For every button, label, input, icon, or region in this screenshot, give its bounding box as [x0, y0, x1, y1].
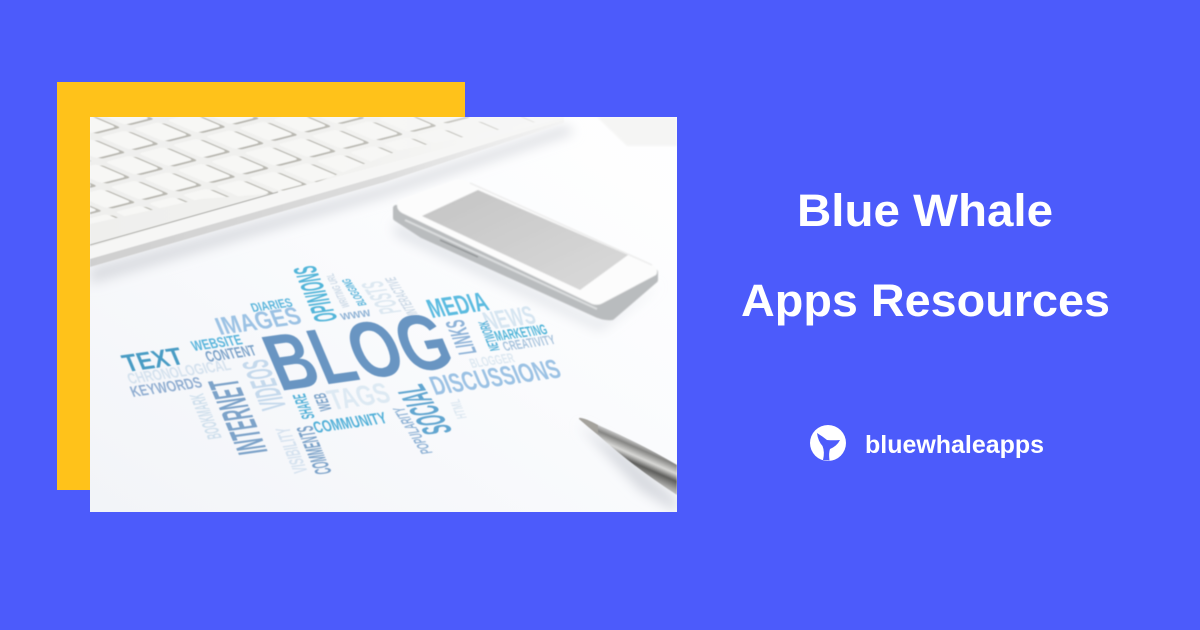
word: BLOGGING: BLOGGING [338, 278, 370, 307]
panel: blog photo [90, 117, 677, 512]
keyboard [90, 117, 565, 267]
word: BLOGGER: BLOGGER [467, 350, 517, 371]
keyboard flat front [284, 181, 320, 192]
phone shadow [394, 224, 616, 330]
word: VISIBILITY: VISIBILITY [272, 426, 313, 474]
word: WWW: WWW [339, 308, 373, 323]
paper background [90, 117, 677, 512]
pen tip [579, 418, 598, 435]
word: WEB: WEB [310, 392, 336, 412]
keyboard key fade [398, 117, 535, 138]
word cloud: INTERNET [199, 376, 277, 457]
word: NEWS: NEWS [479, 301, 540, 336]
phone side highlight [405, 220, 597, 309]
title [741, 185, 1110, 326]
keyboard lower lip [90, 138, 516, 267]
word: CREATIVITY: CREATIVITY [500, 332, 558, 354]
word: CONTENT: CONTENT [203, 343, 259, 366]
word cloud: BOOKMARK [186, 392, 227, 440]
phone top face [396, 201, 658, 306]
panel: blog photo: OPINIONS [286, 264, 345, 324]
word cloud: NETWORK [475, 320, 503, 352]
icon: whale tail badge [810, 425, 846, 461]
word: POPULARITY: POPULARITY [390, 406, 437, 455]
phone screen [422, 190, 628, 290]
word: DIARIES: DIARIES [248, 295, 295, 315]
word cloud: SHARE [289, 393, 319, 420]
pen [579, 418, 677, 495]
word: HTML: HTML [446, 398, 470, 420]
word cloud: COMMENTS [291, 424, 337, 476]
word: LINKS: LINKS [439, 318, 483, 356]
word: MARKETING: MARKETING [492, 322, 550, 345]
phone side button [440, 240, 478, 257]
word: CHRONOLOGICAL: CHRONOLOGICAL [125, 358, 234, 388]
keyboard groove [90, 192, 278, 245]
word: WRITING URL: WRITING URL [324, 273, 353, 308]
word: COMMUNITY: COMMUNITY [310, 409, 390, 437]
keyboard keys [90, 117, 534, 218]
word cloud: INTERACTIVE [382, 276, 422, 316]
word: DISCUSSIONS: DISCUSSIONS [425, 354, 565, 401]
word cloud: SOCIAL [387, 382, 462, 437]
phone [396, 180, 657, 317]
keyboard shadow [90, 126, 575, 284]
phone top edge [470, 183, 652, 265]
pen barrel [598, 425, 677, 495]
big word: BLOG: BLOG [250, 296, 465, 408]
brand name: bluewhaleapps [865, 431, 1044, 459]
word: MEDIA: MEDIA [422, 287, 493, 324]
word: TAGS: TAGS [323, 378, 395, 416]
word cloud: VIDEOS [233, 357, 295, 413]
keyboard body [90, 117, 444, 246]
title line 1: Blue Whale [797, 185, 1053, 236]
word cloud: POSTS [355, 279, 409, 316]
word: IMAGES: IMAGES [211, 301, 306, 341]
word cloud [118, 264, 565, 476]
title line 2: Apps Resources [741, 275, 1110, 326]
word: TEXT: TEXT [118, 342, 188, 378]
phone body [396, 205, 655, 317]
top right table corner [600, 118, 676, 145]
word: KEYWORDS: KEYWORDS [128, 375, 205, 401]
pen shadow [588, 432, 677, 512]
yellow accent block [57, 82, 465, 490]
word: WEBSITE: WEBSITE [189, 332, 245, 355]
logo [810, 425, 1044, 461]
